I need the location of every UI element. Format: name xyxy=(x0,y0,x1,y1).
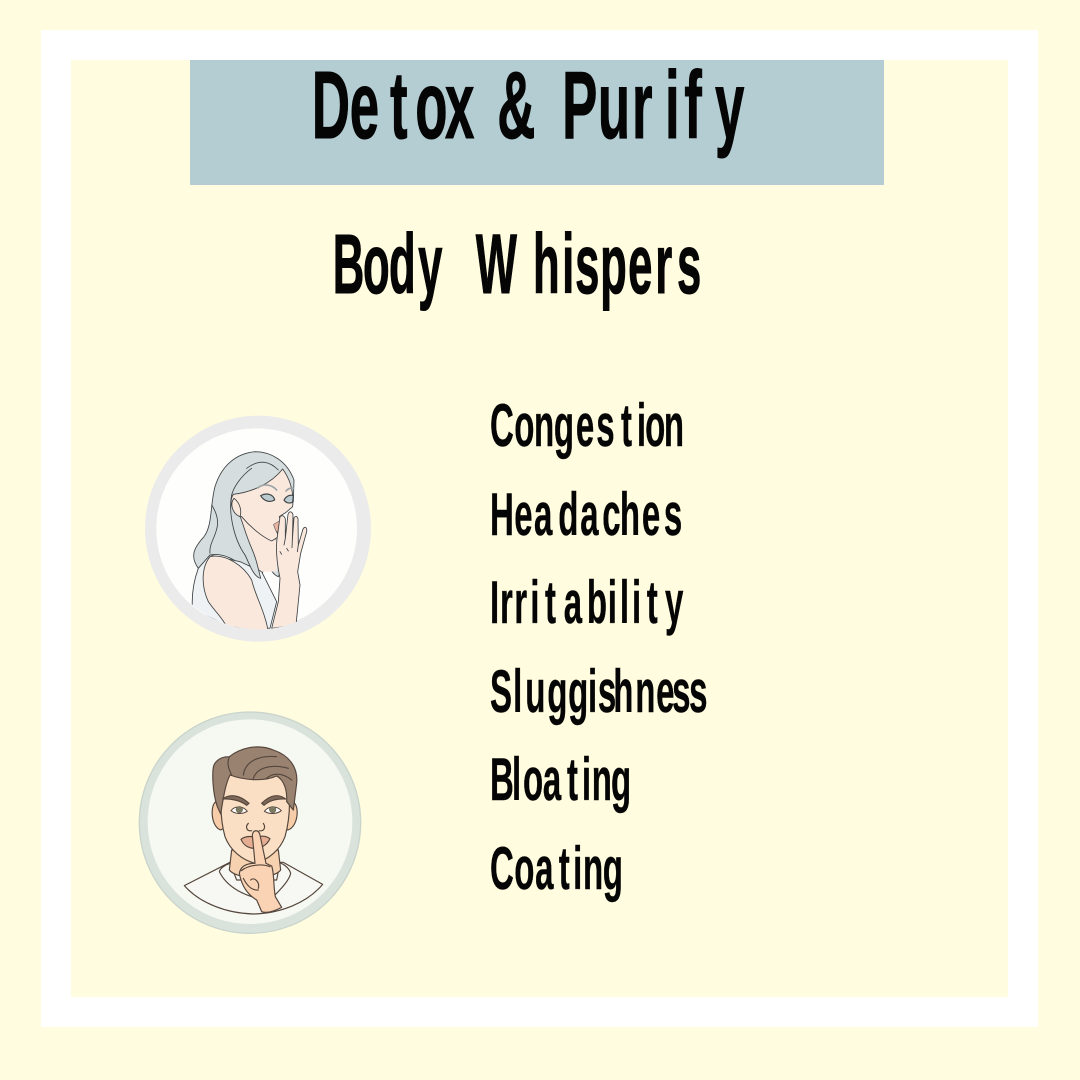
lips xyxy=(273,520,279,532)
collar xyxy=(219,863,291,897)
ear xyxy=(232,498,241,517)
title: Detox & Purify xyxy=(312,52,744,159)
finger lines xyxy=(241,865,270,890)
face xyxy=(231,469,293,541)
item: headaches: Headaches xyxy=(490,482,682,549)
item: bloating: Bloating xyxy=(490,747,631,814)
neck xyxy=(240,517,278,572)
face xyxy=(221,775,290,863)
hair xyxy=(213,747,297,814)
eyes xyxy=(261,494,275,501)
title banner xyxy=(190,52,884,185)
eyes xyxy=(231,807,247,814)
front hair lock xyxy=(231,495,261,578)
shoulder and chest xyxy=(203,556,268,632)
nose xyxy=(247,823,265,831)
finger lines xyxy=(280,538,298,554)
pupils xyxy=(236,806,276,813)
shirt xyxy=(184,862,323,914)
hand xyxy=(272,512,307,628)
icon: man shushing xyxy=(139,712,361,933)
hair strands xyxy=(228,756,292,780)
item: congestion: Congestion xyxy=(490,393,684,460)
symptom list xyxy=(490,393,707,903)
hair strands xyxy=(210,462,278,553)
neck xyxy=(229,850,281,877)
item: sluggishness: Sluggishness xyxy=(490,659,707,726)
mouth xyxy=(241,836,270,848)
hair xyxy=(194,452,294,578)
eyebrows xyxy=(258,485,293,491)
top and dress xyxy=(192,555,277,628)
item: irritability: Irritability xyxy=(490,570,683,637)
item: coating: Coating xyxy=(490,836,623,903)
eyebrows xyxy=(223,796,249,805)
hand xyxy=(239,831,282,912)
icon: woman whispering xyxy=(145,416,371,642)
ears xyxy=(212,802,223,831)
subtitle: Body Whispers xyxy=(333,218,701,312)
